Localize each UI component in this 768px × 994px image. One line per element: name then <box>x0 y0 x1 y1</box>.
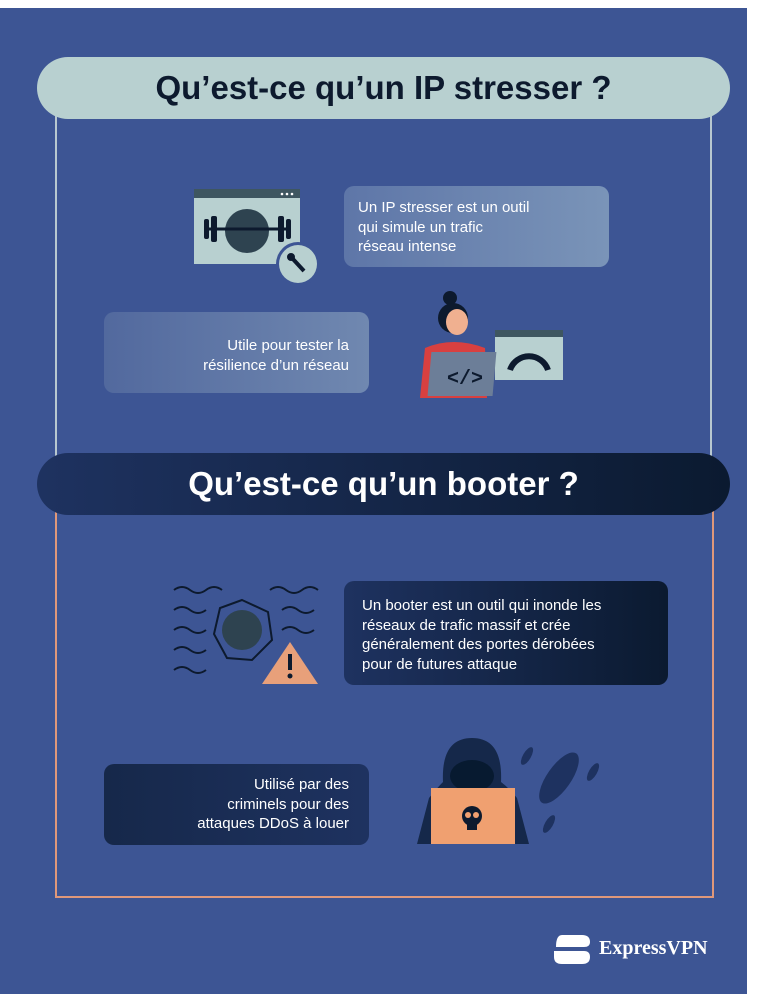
title: IP stresser <box>37 57 730 119</box>
text box: stresser definition: Un IP stresser est un outil <box>358 199 529 216</box>
icon: browser with globe and wrench <box>194 189 317 283</box>
title: booter <box>37 453 730 515</box>
icon: hooded hacker with bombs <box>417 738 599 844</box>
text box: booter definition <box>344 581 668 685</box>
frame: stresser <box>55 100 712 460</box>
logo: ExpressVPN: ExpressVPN <box>599 937 708 959</box>
title: booter: Qu’est-ce qu’un booter ? <box>188 465 579 502</box>
text box: booter usage: attaques DDoS à louer <box>197 815 349 832</box>
text box: booter usage: criminels pour des <box>227 796 349 812</box>
text box: stresser definition <box>344 186 609 267</box>
text box: booter definition: pour de futures attaque <box>362 656 517 672</box>
text box: stresser usage <box>104 312 369 393</box>
icon: woman at laptop with dashboard: </> <box>447 368 483 391</box>
text box: booter definition: généralement des portes dérobées <box>362 636 595 653</box>
icon: woman at laptop with dashboard <box>420 291 563 398</box>
title: IP stresser: Qu’est-ce qu’un IP stresser ? <box>155 69 612 106</box>
frame: booter <box>55 500 714 898</box>
text box: stresser definition: qui simule un trafic <box>358 218 483 236</box>
text box: stresser usage: résilience d’un réseau <box>203 356 349 374</box>
text box: stresser usage: Utile pour tester la <box>227 337 349 354</box>
text box: booter usage: Utilisé par des <box>254 776 349 793</box>
logo: ExpressVPN <box>554 935 708 964</box>
text box: booter definition: Un booter est un outil qui inonde les <box>362 597 601 614</box>
text box: booter usage <box>104 764 369 845</box>
icon: network globe with warning <box>174 586 318 684</box>
text box: booter definition: réseaux de trafic massif et crée <box>362 616 570 634</box>
text box: stresser definition: réseau intense <box>358 238 456 255</box>
